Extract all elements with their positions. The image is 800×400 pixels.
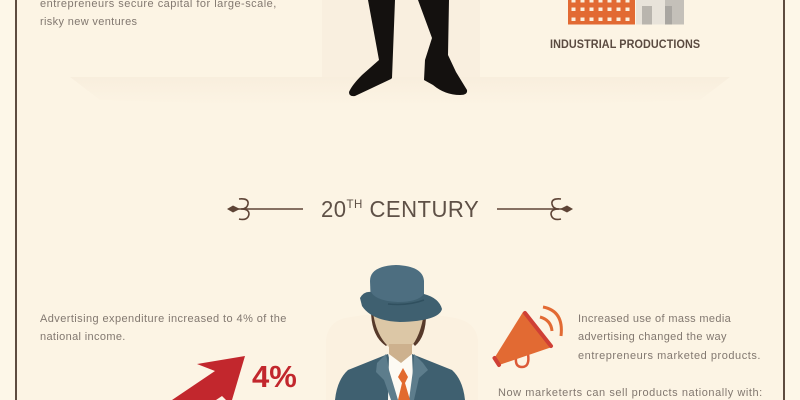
lapel left [376, 354, 398, 400]
page margin left [0, 0, 15, 400]
text: sell nationally: Now marketerts can sell products nationally with: [498, 387, 763, 399]
megaphone mouthpiece [494, 358, 499, 365]
hat crown [370, 265, 424, 308]
text: capital [40, 0, 277, 28]
icon: megaphone [494, 307, 561, 367]
text: advertising expenditure: national income. [40, 331, 126, 343]
text: advertising expenditure [40, 313, 287, 343]
figure: legs and shoes [349, 0, 467, 96]
tie [398, 368, 410, 400]
frame border left [15, 0, 17, 400]
text: advertising expenditure: Advertising expenditure increased to 4% of the [40, 313, 287, 325]
heading ornament: right [497, 199, 573, 219]
text: capital: risky new ventures [40, 16, 137, 28]
text: mass media: Increased use of mass media [578, 313, 731, 325]
icon: factory [568, 0, 684, 24]
text: mass media [578, 313, 761, 362]
suit jacket [335, 354, 465, 400]
label: industrial productions: INDUSTRIAL PRODUCTIONS [550, 39, 700, 51]
face [373, 312, 424, 353]
figure backdrop panel: bottom [326, 313, 478, 400]
hat crease [388, 300, 424, 304]
factory grey buildings [636, 0, 684, 24]
hat brim [360, 292, 442, 322]
megaphone body [495, 312, 552, 365]
figure backdrop panel: top [322, 0, 480, 77]
floor shadow band [70, 77, 730, 106]
icon: red growth arrow [172, 356, 245, 400]
text: mass media: advertising changed the way [578, 331, 727, 343]
hair [371, 310, 426, 346]
neck [389, 344, 412, 366]
stat: 4%: 4% [252, 359, 297, 394]
heading: 20th century: 20TH CENTURY [321, 196, 479, 222]
page margin right [785, 0, 800, 400]
lapel right [409, 354, 428, 400]
frame border right [783, 0, 785, 400]
heading ornament: left [227, 199, 303, 219]
megaphone handle [516, 354, 528, 367]
factory brick building [568, 0, 635, 24]
sound waves [540, 307, 561, 336]
shirt [388, 354, 414, 400]
megaphone bell rim [525, 313, 551, 346]
figure: businessman [335, 265, 465, 400]
text: mass media: entrepreneurs marketed products. [578, 350, 761, 362]
